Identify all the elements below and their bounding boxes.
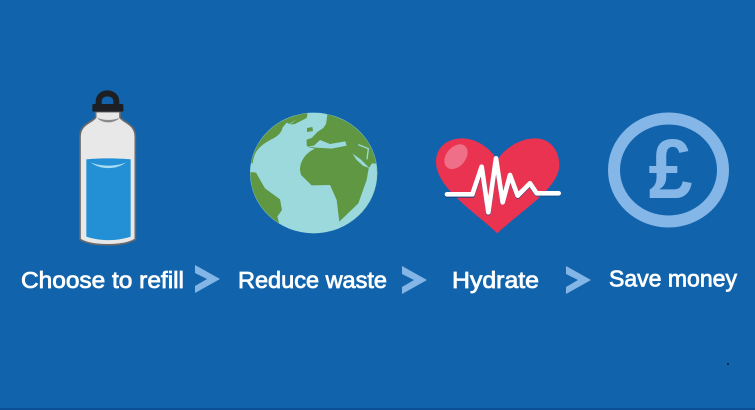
icon: pound coin	[614, 118, 723, 222]
label: choose to refill: Choose to refill	[21, 267, 184, 293]
arrow 2	[402, 266, 427, 294]
icon: pound coin: £	[648, 122, 692, 216]
arrow 3	[566, 266, 591, 294]
label: hydrate: Hydrate	[452, 267, 539, 293]
label: save money: Save money	[609, 266, 737, 292]
label: reduce waste: Reduce waste	[238, 267, 387, 293]
icon: earth globe	[250, 112, 378, 234]
icon: heart with pulse line	[436, 138, 559, 233]
icon: water bottle	[80, 93, 135, 245]
arrow 1	[195, 265, 220, 293]
